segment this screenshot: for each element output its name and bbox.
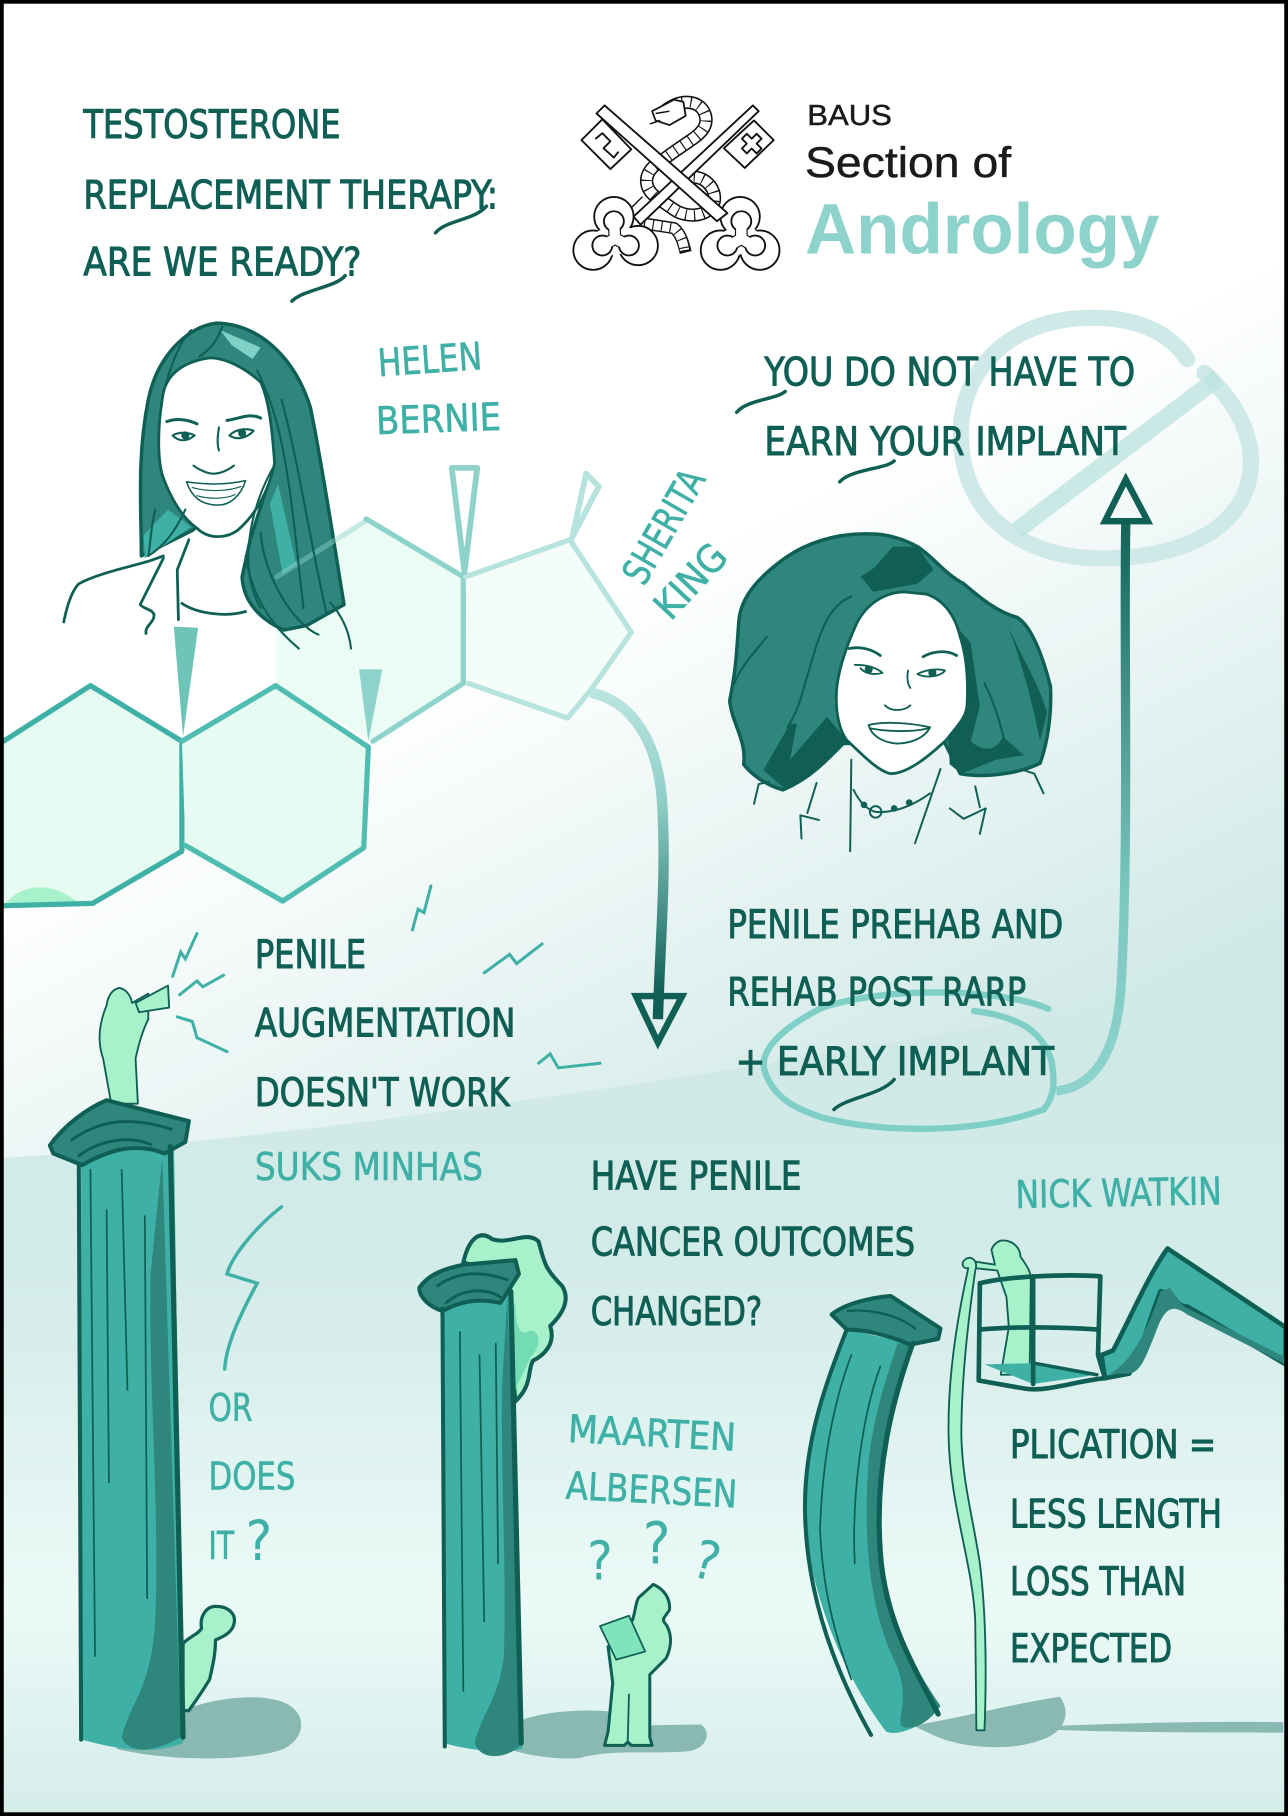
icon: serpent: [635, 100, 715, 252]
figure: megaphone person: [100, 986, 169, 1104]
text: BAUS Section of Andrology: Section of: [805, 139, 1011, 187]
question marks: ?: [686, 1528, 727, 1595]
arrowhead: [1105, 479, 1148, 521]
column capital: [50, 1100, 189, 1165]
text: penile prehab and rehab: PENILE PREHAB AND: [727, 902, 1063, 948]
text: plication: PLICATION =: [1010, 1422, 1216, 1468]
panel: title: ARE WE READY?: [83, 240, 361, 286]
figure: blob behind pillar: [463, 1235, 566, 1401]
arrowhead: [636, 996, 682, 1042]
text: or does it: DOES: [209, 1455, 295, 1499]
text: penile prehab and rehab: + EARLY IMPLANT: [735, 1039, 1054, 1085]
figure shadows: [116, 1697, 1283, 1758]
facial features: [167, 416, 261, 505]
jacket lines: [64, 540, 246, 634]
column capital: [419, 1260, 519, 1311]
question marks: ?: [643, 1510, 670, 1578]
callout: you do not have to earn your implant: YOU DO NOT HAVE TO: [764, 350, 1135, 396]
text: penile augmentation: [255, 932, 515, 1116]
name: Maarten Albersen: [565, 1408, 738, 1518]
question marks: [587, 1510, 727, 1595]
name: Helen Bernie: BERNIE: [375, 396, 502, 444]
portrait: Helen Bernie: [64, 323, 367, 649]
hair strands: [734, 596, 1008, 753]
text: have penile cancer outcomes changed: HAVE PENILE: [591, 1153, 802, 1199]
ring: first hexagon: [4, 686, 182, 906]
text: have penile cancer outcomes changed: CHANGED?: [591, 1289, 762, 1335]
hair: [140, 323, 344, 630]
text: BAUS Section of Andrology: BAUS: [807, 100, 892, 132]
boom arm: [1101, 1248, 1286, 1378]
name: Sherita King: KING: [646, 535, 737, 629]
face: [836, 592, 967, 774]
boom lift with figure: [948, 1240, 1286, 1730]
wedge bonds: [452, 468, 477, 572]
text: BAUS Section of Andrology: Andrology: [805, 190, 1159, 270]
text: or does it: IT: [209, 1525, 235, 1569]
icon: key right-to-left: [634, 105, 780, 270]
arrow: implant circle up: [1056, 479, 1148, 1091]
callout: you do not have to earn your implant: EARN YOUR IMPLANT: [764, 419, 1126, 465]
face: [159, 358, 275, 537]
text: BAUS Section of Andrology: [805, 100, 1159, 270]
column shaft: [805, 1330, 938, 1733]
panel: title: REPLACEMENT THERAPY:: [83, 172, 498, 218]
figure: worker: [973, 1240, 1031, 1375]
ring: second hexagon: [182, 686, 368, 901]
no sign: [961, 318, 1251, 558]
name: Sherita King: SHERITA: [615, 461, 715, 592]
icon: sound bolts: [173, 886, 600, 1068]
name: Helen Bernie: [375, 335, 502, 444]
name: Suks Minhas: SUKS MINHAS: [255, 1146, 483, 1190]
lightning connector: [225, 1207, 281, 1369]
text: plication: LOSS THAN: [1010, 1559, 1186, 1605]
callout: you do not have to earn your implant: [737, 350, 1135, 482]
question marks: ?: [587, 1531, 613, 1593]
facial features: [849, 648, 957, 744]
pillar 1 with figures: [50, 986, 234, 1750]
figure: hiding person: [183, 1606, 234, 1711]
text: penile prehab and rehab: REHAB POST RARP: [727, 969, 1026, 1015]
pillar 3 curved: [805, 1296, 940, 1735]
hair: [730, 534, 1051, 790]
text: or does it: OR: [209, 1387, 253, 1431]
text: penile augmentation: PENILE: [255, 932, 366, 978]
text: plication: EXPECTED: [1010, 1626, 1172, 1672]
ribbon: [948, 1258, 986, 1730]
ring: pentagon: [466, 540, 631, 718]
panel: title: TESTOSTERONE: [83, 102, 341, 148]
name: Helen Bernie: HELEN: [376, 335, 483, 386]
panel: title: [83, 102, 498, 301]
hair strands: [148, 327, 351, 649]
text: or does it: ?: [246, 1509, 272, 1574]
pillar 2 with figure: [419, 1235, 671, 1756]
jacket and necklace: [754, 760, 1044, 851]
figure: person with paper: [600, 1584, 671, 1745]
text: plication: LESS LENGTH: [1010, 1492, 1222, 1538]
circle around early implant: [764, 992, 1053, 1129]
molecule: steroid rings: [4, 468, 631, 906]
name: Sherita King: [615, 461, 737, 629]
logo: crossed keys and serpent: [573, 100, 1159, 270]
text: have penile cancer outcomes changed: [591, 1153, 915, 1335]
ring: third hexagon: [276, 519, 463, 741]
column shaft: [444, 1280, 522, 1751]
text: penile augmentation: DOESN'T WORK: [255, 1070, 510, 1116]
text: or does it: [209, 1387, 295, 1574]
icon: key left-to-right: [573, 105, 727, 270]
name: Maarten Albersen: MAARTEN: [567, 1408, 737, 1461]
text: have penile cancer outcomes changed: CANCER OUTCOMES: [591, 1219, 915, 1265]
arrow: molecule to implant down: [591, 693, 682, 1042]
text: penile prehab and rehab: [727, 902, 1063, 1110]
column shaft: [81, 1133, 183, 1750]
name: Nick Watkin: NICK WATKIN: [1015, 1170, 1222, 1218]
portrait: Sherita King: [730, 534, 1051, 851]
cage: [984, 1363, 1097, 1384]
name: Maarten Albersen: ALBERSEN: [565, 1465, 738, 1518]
column capital: [832, 1296, 940, 1345]
text: penile augmentation: AUGMENTATION: [255, 1001, 515, 1047]
text: plication: [1010, 1422, 1222, 1672]
